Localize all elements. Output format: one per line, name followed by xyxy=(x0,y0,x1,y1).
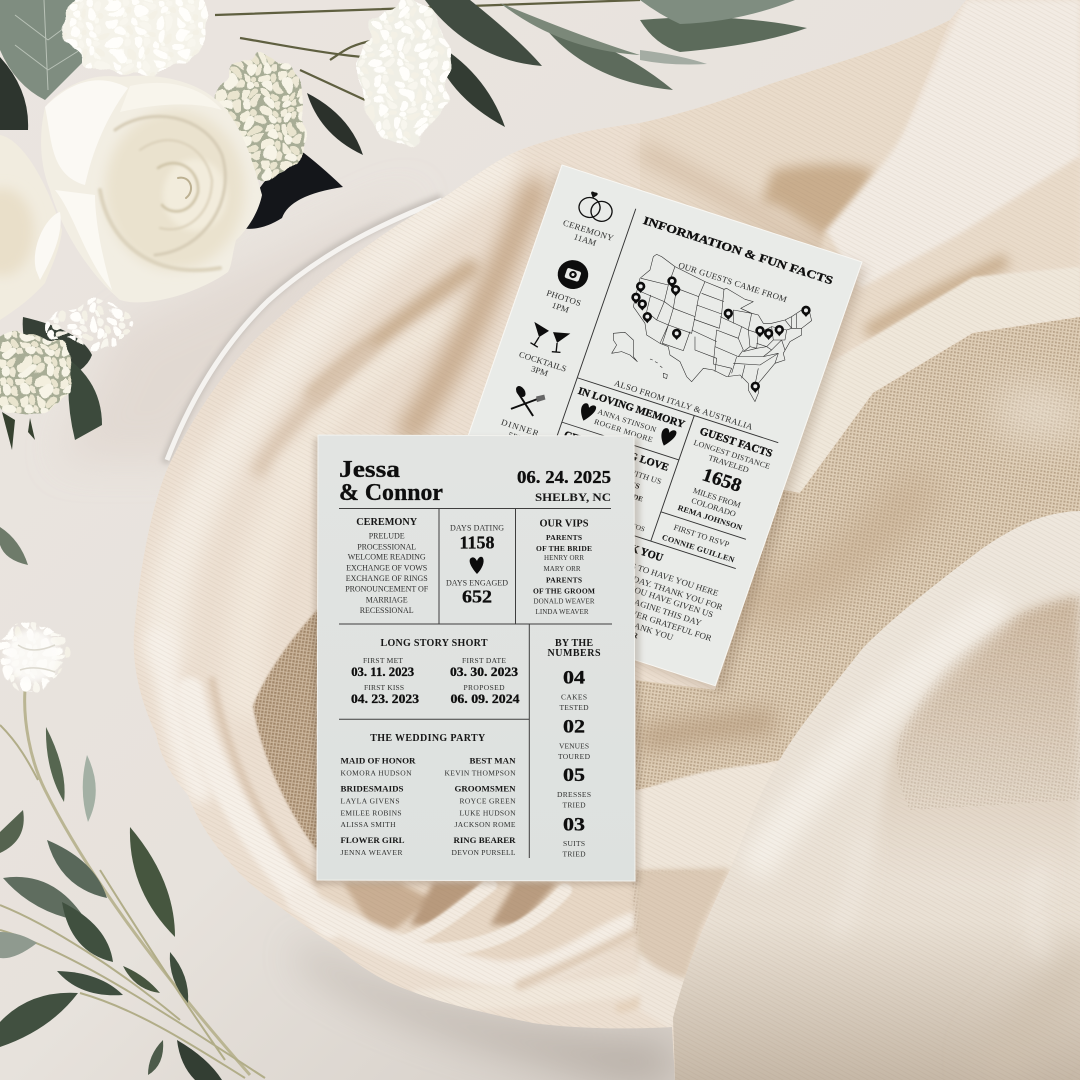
panel: guest facts xyxy=(660,425,776,565)
panel: the wedding party: ROYCE GREEN xyxy=(460,797,516,806)
panel: ceremony: MARRIAGE xyxy=(366,595,408,604)
panel: ceremony xyxy=(345,517,429,615)
left rolled edge xyxy=(160,640,330,925)
date and place: 06. 24. 2025 xyxy=(517,467,611,487)
panel: long story short: FIRST KISS xyxy=(364,683,404,692)
panel: our vips: PARENTS xyxy=(546,576,582,585)
panel: day counters: 1158 xyxy=(460,533,494,553)
panel: by the numbers: 05 xyxy=(563,765,585,786)
panel: the wedding party: RING BEARER xyxy=(454,836,516,845)
panel: guest facts: COLORADO xyxy=(690,496,737,519)
panel: celebrating love: CELEBRATING LOVE xyxy=(562,429,670,474)
chart: US guest map with location pins xyxy=(612,254,812,402)
panel: day counters xyxy=(446,524,508,607)
panel: thank you: ALL THAT YOU HAVE GIVEN US xyxy=(585,570,715,619)
title: couple names: Jessa xyxy=(339,457,400,483)
panel: long story short: 03. 11. 2023 xyxy=(351,664,415,679)
panel: our vips: OF THE GROOM xyxy=(533,587,595,596)
panel: celebrating love xyxy=(541,429,670,534)
panel: the wedding party: MAID OF HONOR xyxy=(340,757,416,766)
panel: long story short: 04. 23. 2023 xyxy=(351,691,420,706)
panel: in loving memory: IN LOVING MEMORY xyxy=(576,385,686,431)
panel: the wedding party: FLOWER GIRL xyxy=(340,836,404,845)
panel: our vips: DONALD WEAVER xyxy=(534,597,595,605)
panel: by the numbers: CAKES xyxy=(561,692,587,701)
panel: day counters: DAYS ENGAGED xyxy=(446,578,508,587)
icon: wedding rings xyxy=(576,189,617,224)
front card shadow xyxy=(314,438,640,885)
panel: guest facts: LONGEST DISTANCE xyxy=(692,438,771,471)
schedule label: dinner: 5PM xyxy=(507,430,527,444)
panel: our vips xyxy=(533,519,595,616)
panel: in loving memory: ANNA STINSON xyxy=(596,407,658,434)
panel: the wedding party: KOMORA HUDSON xyxy=(340,769,412,778)
schedule label: cocktails: COCKTAILS xyxy=(518,349,568,374)
panel: ceremony: EXCHANGE OF RINGS xyxy=(346,574,428,583)
schedule label: cocktails: 3PM xyxy=(530,364,550,378)
panel: the wedding party: GROOMSMEN xyxy=(454,785,516,794)
icon: spoon and fork xyxy=(507,383,548,418)
panel: ceremony: WELCOME READING xyxy=(348,553,426,562)
panel: by the numbers: TOURED xyxy=(558,752,591,761)
panel: thank you: WE COULD NOT IMAGINE THIS DAY xyxy=(556,572,704,628)
right burlap band xyxy=(636,317,1080,790)
panel: day counters: 652 xyxy=(462,587,492,607)
panel: long story short: 03. 30. 2023 xyxy=(450,664,519,679)
panel: thank you: FOREVER xyxy=(600,620,640,640)
panel: in loving memory: ROGER MOORE xyxy=(593,417,654,444)
panel: our vips: PARENTS xyxy=(546,533,582,542)
upper right bright fold xyxy=(825,0,1080,290)
panel: the wedding party: ALISSA SMITH xyxy=(340,820,396,829)
grid lines xyxy=(339,508,612,858)
panel: long story short: LONG STORY SHORT xyxy=(380,638,488,649)
panel: the wedding party: EMILEE ROBINS xyxy=(340,808,402,817)
panel: by the numbers: 02 xyxy=(563,716,585,737)
burlap inset in lower right xyxy=(882,592,1080,840)
cream fold under back card xyxy=(635,763,780,870)
panel: by the numbers: TESTED xyxy=(560,703,589,712)
hydrangea and baby's breath flowers xyxy=(0,0,451,414)
panel: thank you: WITHOUT YOU, FOREVER GRATEFUL FOR xyxy=(544,580,713,643)
panel: our vips: MARY ORR xyxy=(544,565,581,573)
panel: long story short: 06. 09. 2024 xyxy=(450,691,520,706)
panel: ceremony: RECESSIONAL xyxy=(360,606,414,615)
panel: the wedding party: LUKE HUDSON xyxy=(460,808,516,817)
folds below front card xyxy=(318,880,640,960)
panel: ceremony: CEREMONY xyxy=(356,517,418,528)
panel: long story short: FIRST MET xyxy=(363,656,403,665)
carnation and lower stems xyxy=(0,623,265,1078)
schedule label: dinner xyxy=(497,417,540,448)
panel: ceremony: PRONOUNCEMENT OF xyxy=(345,585,429,594)
panel: by the numbers: DRESSES xyxy=(557,790,591,799)
panel: celebrating love: ANNIVERSARIES xyxy=(576,462,641,491)
schedule divider and grid lines xyxy=(505,209,838,653)
panel: by the numbers: 03 xyxy=(563,814,585,835)
panel: celebrating love: PHOTOS xyxy=(616,517,646,533)
icon: heart left xyxy=(578,402,597,423)
panel: long story short: PROPOSED xyxy=(464,683,505,692)
panel: back card information and fun facts xyxy=(415,165,862,686)
panel: thank you: ON THIS SPECIAL DAY. THANK YOU FOR xyxy=(560,551,724,612)
large lower right fold xyxy=(673,511,1080,1080)
schedule label: dinner: DINNER xyxy=(500,417,540,438)
map outline and state lines xyxy=(612,254,812,402)
schedule label: ceremony xyxy=(558,218,616,253)
icon: heart xyxy=(470,557,484,574)
title: couple names xyxy=(339,457,443,506)
panel: our vips: LINDA WEAVER xyxy=(536,608,589,616)
panel: by the numbers: 04 xyxy=(563,667,586,688)
burlap right of front card xyxy=(632,872,640,928)
glass plate rim xyxy=(165,198,442,463)
panel: thank you: YOU ALL, THANK YOU xyxy=(581,604,675,642)
middle sheet xyxy=(822,162,1075,292)
fabric cast shadow on surface xyxy=(300,945,672,1080)
panel: ceremony: PROCESSIONAL xyxy=(357,542,416,551)
panel: thank you xyxy=(537,522,734,662)
schedule label: ceremony: CEREMONY xyxy=(562,218,616,243)
heading: information and fun facts: INFORMATION & FUN FACTS xyxy=(641,213,835,287)
panel: guest facts: GUEST FACTS xyxy=(698,426,774,460)
panel: by the numbers: BY THE xyxy=(555,638,593,649)
upper left sheet folds xyxy=(165,165,535,700)
panel: the wedding party: JACKSON ROME xyxy=(454,820,516,829)
icon: camera xyxy=(554,256,592,293)
second bright fold xyxy=(783,267,1080,493)
panel: ceremony: EXCHANGE OF VOWS xyxy=(346,563,427,572)
panel: the wedding party: KEVIN THOMPSON xyxy=(444,769,516,778)
panel: by the numbers xyxy=(548,638,601,858)
white roses xyxy=(0,76,262,320)
back card shadow xyxy=(468,172,866,692)
panel: the wedding party: THE WEDDING PARTY xyxy=(370,733,486,744)
panel: the wedding party: DEVON PURSELL xyxy=(452,848,516,857)
panel: day counters: DAYS DATING xyxy=(450,524,504,533)
panel: the wedding party: LAYLA GIVENS xyxy=(340,797,400,806)
schedule label: photos: PHOTOS xyxy=(545,288,583,308)
panel: celebrating love: CELEBRATING WITH US xyxy=(570,449,663,486)
panel: by the numbers: SUITS xyxy=(563,839,585,848)
panel: guest facts: REMA JOHNSON xyxy=(677,503,744,532)
location pins xyxy=(631,276,811,393)
panel: by the numbers: VENUES xyxy=(559,741,589,750)
left burlap hollow xyxy=(253,609,318,852)
panel: long story short xyxy=(351,638,520,706)
title: couple names: & Connor xyxy=(339,480,443,506)
subheading: guests: OUR GUESTS CAME FROM xyxy=(677,260,789,304)
schedule label: photos xyxy=(542,288,583,317)
tan upper right sheet xyxy=(640,20,950,500)
foliage: lower left leaves xyxy=(0,727,222,1080)
panel: long story short: FIRST DATE xyxy=(462,656,506,665)
panel: by the numbers: NUMBERS xyxy=(548,648,601,659)
panel: guest facts: TRAVELED xyxy=(707,453,750,475)
panel: the wedding party: JENNA WEAVER xyxy=(340,848,402,857)
panel: front card wedding program xyxy=(317,435,635,881)
panel: by the numbers: TRIED xyxy=(562,801,586,810)
panel: guest facts: CONNIE GUILLEN xyxy=(661,533,736,564)
date and place xyxy=(517,467,611,504)
date and place: SHELBY, NC xyxy=(535,490,611,504)
panel: our vips: OUR VIPS xyxy=(540,519,589,530)
schedule label: cocktails xyxy=(515,349,568,383)
panel: the wedding party: BEST MAN xyxy=(470,757,516,766)
panel: thank you: SO MUCH TO US TO HAVE YOU HERE xyxy=(570,541,720,598)
panel: celebrating love: BRIDE xyxy=(619,489,644,504)
stat: 1658 miles: 1658 xyxy=(699,465,744,497)
panel: in loving memory xyxy=(569,385,686,452)
panel: thank you: THANK YOU xyxy=(601,534,664,564)
foliage: top stems and leaves xyxy=(0,0,807,565)
panel: ceremony: PRELUDE xyxy=(369,532,405,541)
panel: our vips: HENRY ORR xyxy=(544,554,584,562)
panel: the wedding party: BRIDESMAIDS xyxy=(340,785,404,794)
panel: by the numbers: TRIED xyxy=(562,849,586,858)
caption: also from: ALSO FROM ITALY & AUSTRALIA xyxy=(613,378,755,432)
icon: heart right xyxy=(658,427,677,448)
panel: our vips: OF THE BRIDE xyxy=(536,544,592,553)
panel: guest facts: MILES FROM xyxy=(692,486,742,510)
panel: the wedding party xyxy=(340,733,516,857)
schedule label: photos: 1PM xyxy=(551,300,571,315)
surface tint near roses xyxy=(60,190,420,460)
panel: guest facts: FIRST TO RSVP xyxy=(673,523,731,549)
schedule label: ceremony: 11AM xyxy=(573,232,598,248)
icon: cocktail glasses xyxy=(527,322,570,355)
